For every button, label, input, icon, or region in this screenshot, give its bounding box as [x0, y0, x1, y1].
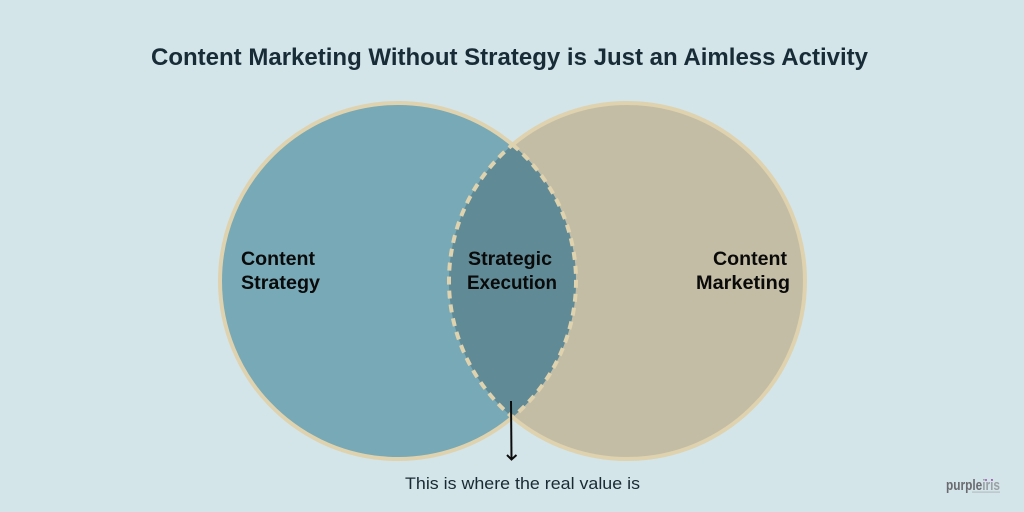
title: Content Marketing Without Strategy is Just an Aimless Activity	[151, 44, 869, 71]
logo: purpleiris: purpleiris	[946, 478, 1000, 494]
circle: content strategy	[220, 103, 576, 459]
label: content strategy: Strategy	[241, 273, 320, 294]
outline: content strategy outer arc	[220, 103, 512, 459]
label: content marketing: Marketing	[696, 273, 790, 294]
venn diagram	[220, 103, 805, 459]
arrow: pointing to caption	[507, 401, 516, 460]
overlap: strategic execution fill	[449, 145, 576, 417]
outline: overlap dashed edge	[449, 145, 576, 417]
circle: content marketing	[449, 103, 805, 459]
label: content strategy: Content	[241, 249, 316, 270]
caption: This is where the real value is	[405, 474, 640, 493]
label: strategic execution: Strategic	[468, 249, 552, 270]
outline: content marketing outer arc	[512, 103, 805, 459]
label: strategic execution: Execution	[467, 273, 557, 294]
label: content marketing: Content	[713, 249, 788, 270]
